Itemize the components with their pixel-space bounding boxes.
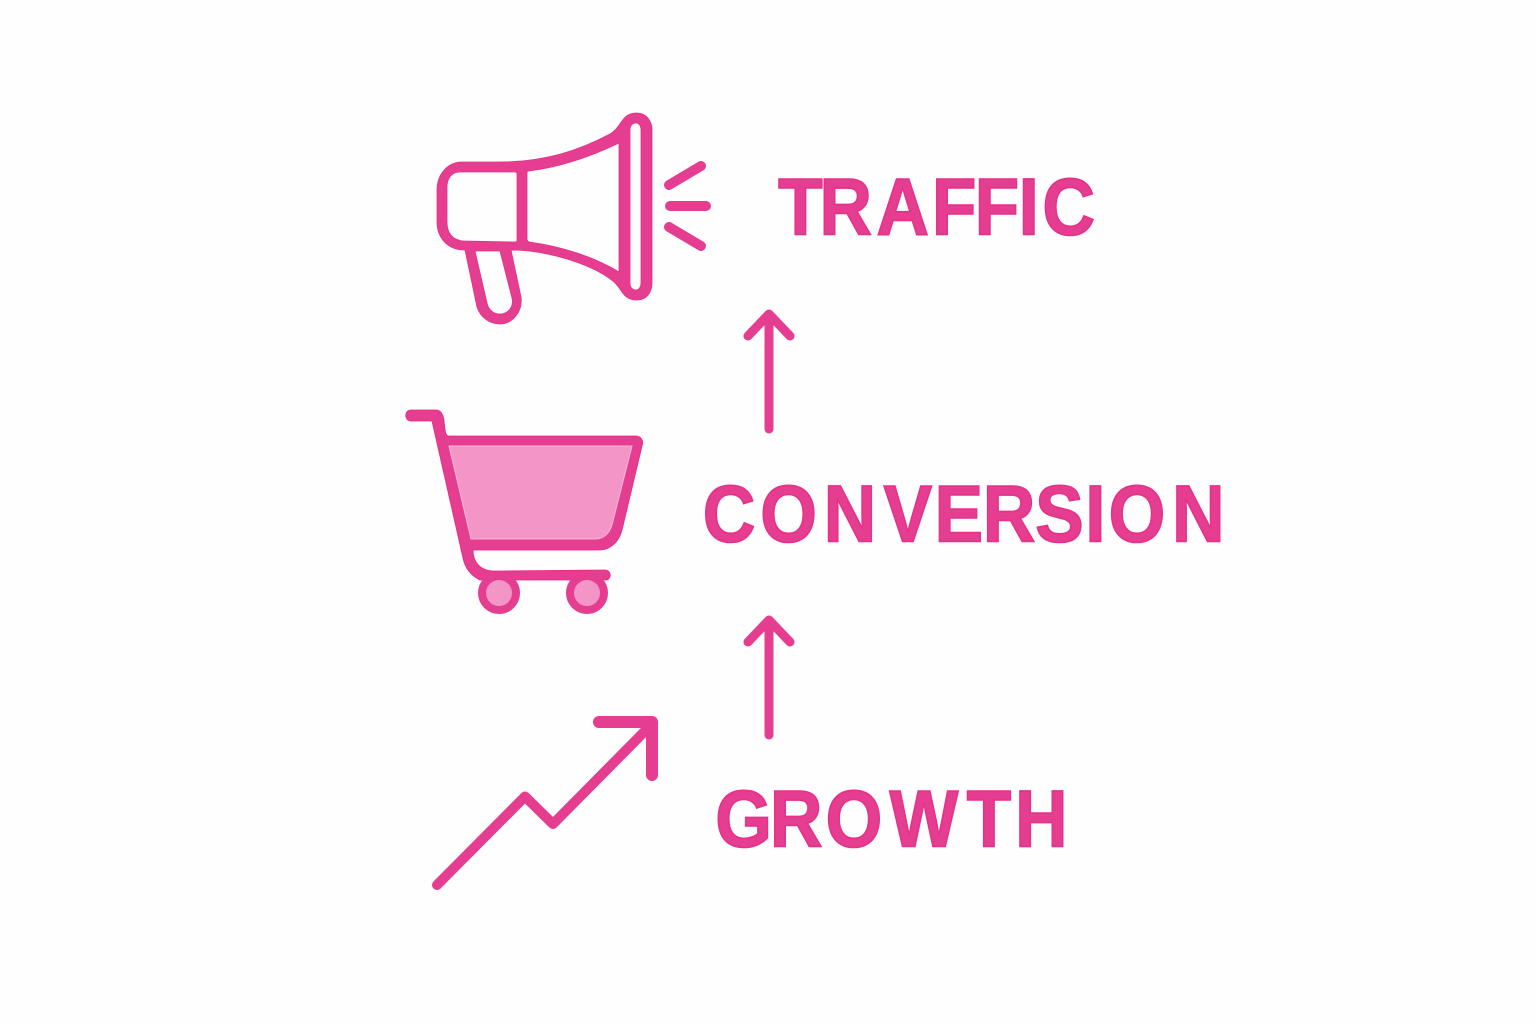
heading: conversion: CONVERSION — [703, 469, 1225, 560]
arrow: conversion to traffic — [748, 314, 790, 429]
cart wheels — [482, 576, 604, 610]
icon: sound waves — [669, 166, 706, 246]
heading: traffic: TRAFFIC — [778, 162, 1095, 252]
icon: shopping cart — [406, 410, 643, 610]
heading: growth: GROWTH — [715, 774, 1068, 865]
icon: growth trend arrow — [437, 722, 652, 885]
arrow: growth to conversion — [748, 620, 790, 735]
icon: megaphone — [437, 113, 706, 324]
cart basket fill — [449, 446, 632, 539]
